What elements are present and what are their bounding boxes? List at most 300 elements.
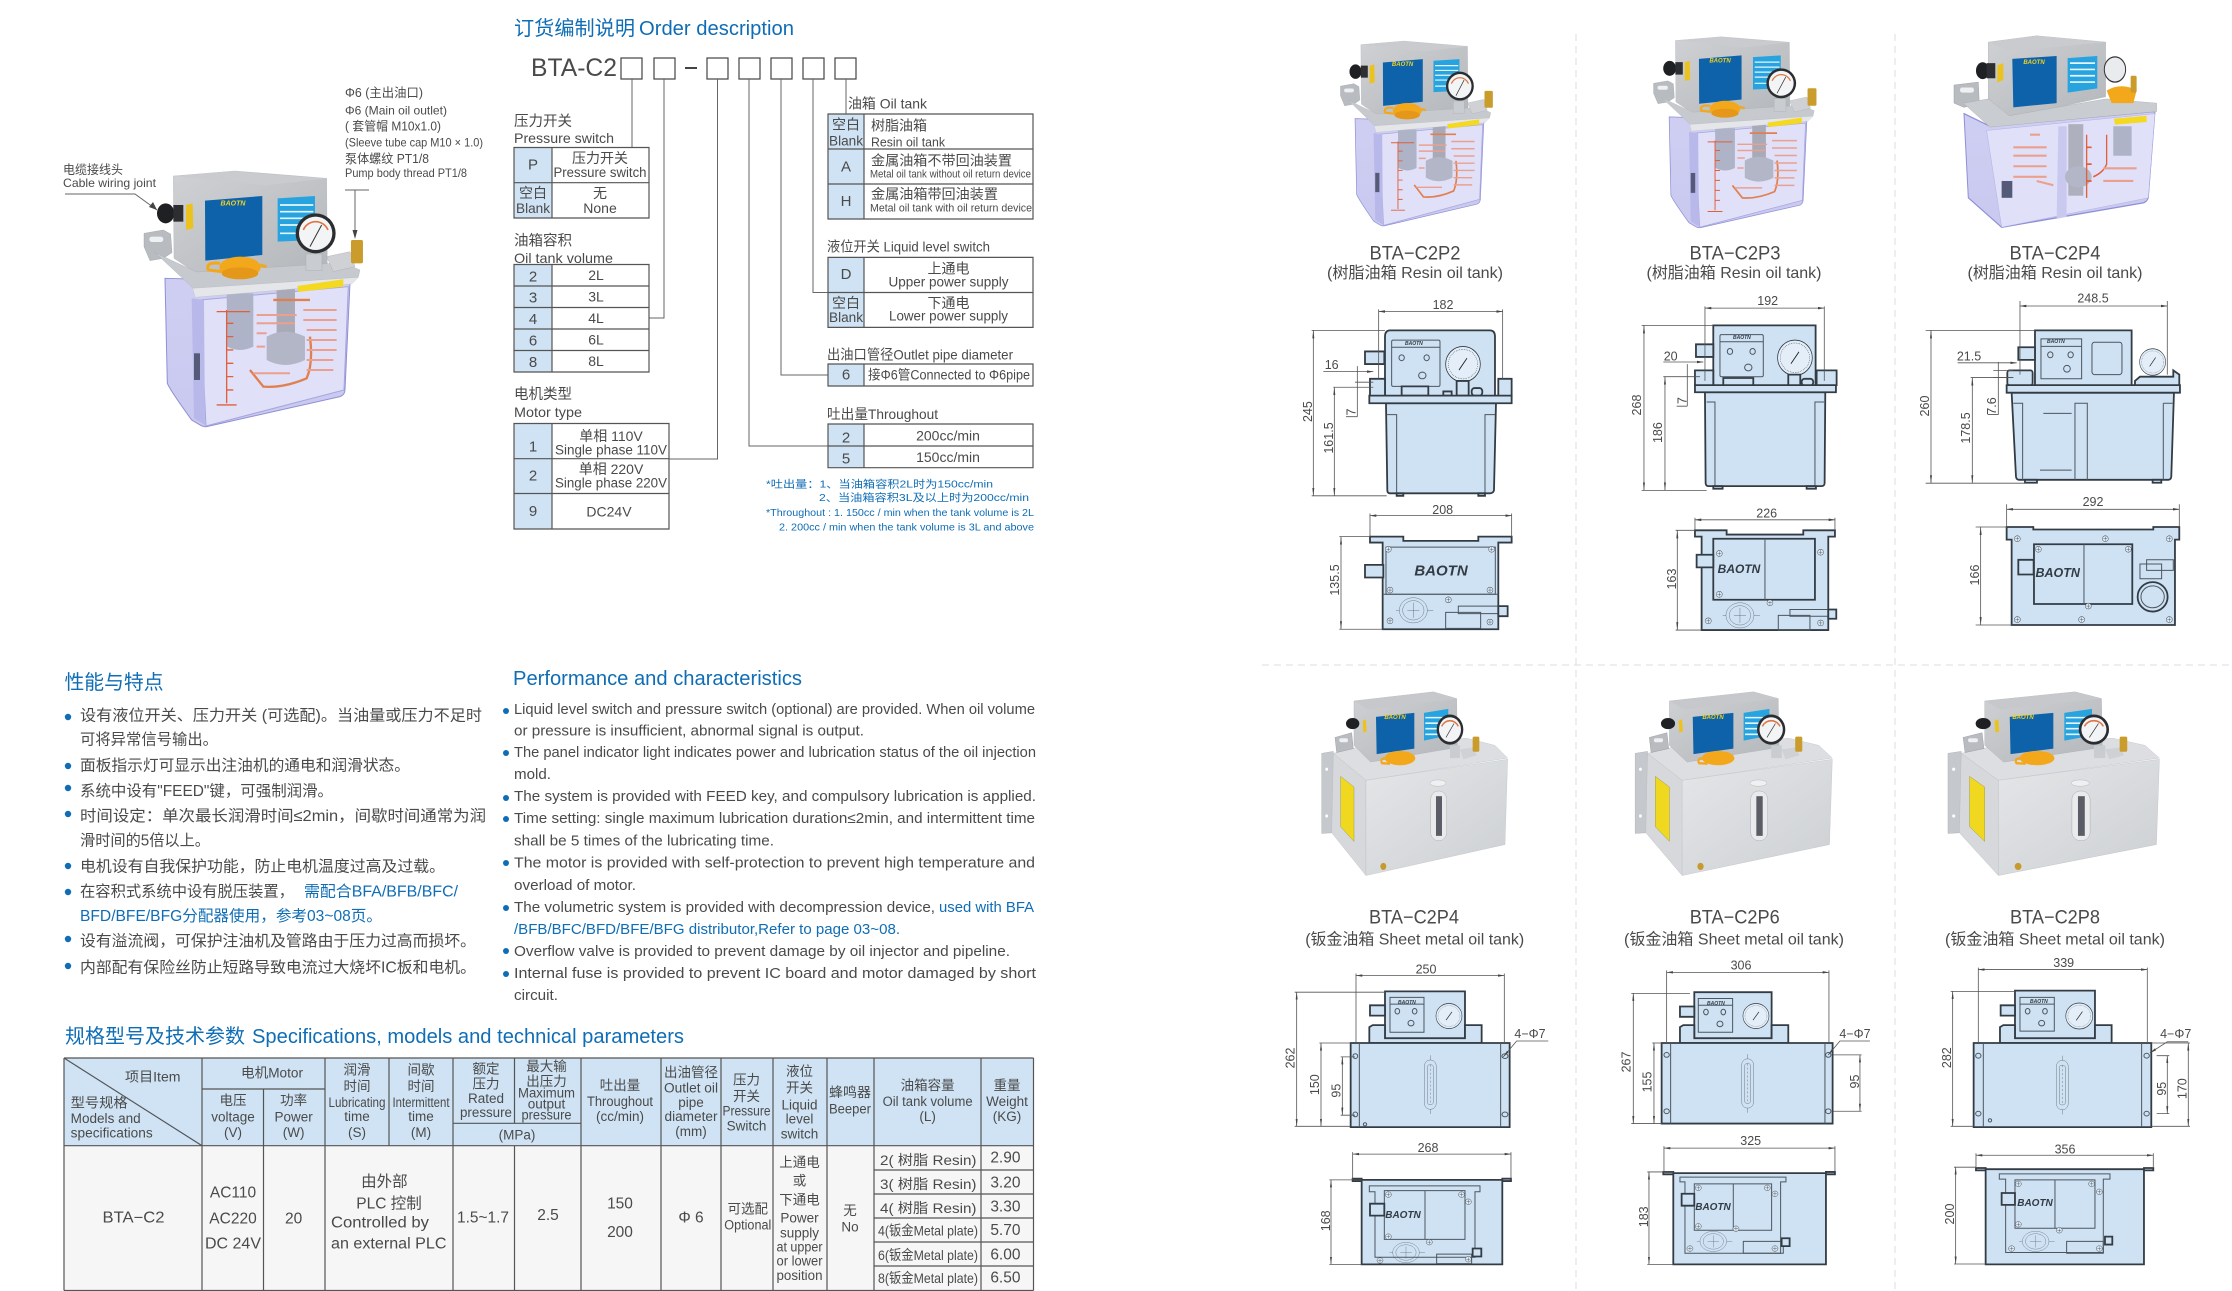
header labels: 电机Motor: [241, 1066, 304, 1080]
header labels: pipe: [678, 1095, 704, 1110]
throughout table: [827, 406, 1033, 468]
characteristics list text: Internal fuse is provided to prevent IC board and motor damaged by short: [514, 966, 1036, 982]
side view drawing with dimensions: 186: [1651, 422, 1665, 443]
header labels: (S): [348, 1125, 366, 1140]
BTA-C2 data row: 6.50: [990, 1270, 1021, 1286]
side view drawing with dimensions: 150: [1308, 1074, 1322, 1095]
side view drawing with dimensions: [1284, 963, 1548, 1127]
header labels: Rated: [468, 1091, 504, 1106]
BTA-C2 data row: 6(钣金Metal plate): [878, 1247, 978, 1263]
callout: main oil outlet and pump body thread: Pump body thread PT1/8: [345, 166, 467, 180]
motor type table: Single phase 110V: [555, 442, 667, 458]
panel: BTA-C2P4 resin: [1918, 36, 2180, 625]
side view drawing with dimensions: 7: [1676, 397, 1690, 404]
throughout table: 150cc/min: [916, 449, 980, 465]
motor type table: 1: [529, 438, 537, 456]
feature list text: 时间设定：单次最长润滑时间≤2min，间歇时间通常为润: [80, 807, 486, 825]
side view drawing with dimensions: 267: [1620, 1052, 1634, 1072]
oil tank volume table: 4: [529, 311, 537, 328]
dashed separators between product panels: [1262, 34, 2232, 1291]
side view drawing with dimensions: 95: [1330, 1084, 1344, 1098]
pressure switch table: 压力开关: [572, 150, 628, 166]
liquid level switch table: Upper power supply: [888, 274, 1009, 289]
product photo: [1948, 692, 2159, 876]
side view drawing with dimensions: 155: [1641, 1072, 1655, 1092]
side view drawing with dimensions: 20: [1664, 350, 1678, 364]
characteristics list text: Liquid level switch and pressure switch (optional) are provided. When oil volume: [514, 702, 1035, 718]
BTA-C2 data row: 3.30: [990, 1198, 1021, 1216]
BTA-C2 data row: Controlled by: [331, 1214, 429, 1232]
pressure switch table: Blank: [516, 200, 551, 216]
heading: order description: 订货编制说明: [514, 17, 635, 40]
BTA-C2 data row: BTA−C2: [102, 1210, 164, 1226]
BTA-C2 data row: 可选配: [728, 1202, 769, 1216]
side view drawing with dimensions: 182: [1433, 298, 1453, 312]
header labels: Outlet oil: [664, 1080, 718, 1096]
product photo: [1340, 41, 1493, 226]
BTA-C2 data row: Φ 6: [678, 1210, 704, 1226]
motor type table: DC24V: [586, 504, 632, 520]
header labels: 功率: [280, 1092, 307, 1108]
header labels: 时间: [408, 1079, 434, 1094]
photo brand label: BAOTN: [1384, 715, 1406, 721]
header labels: (W): [283, 1125, 304, 1140]
oil tank volume table: 4L: [588, 310, 604, 326]
header labels: Liquid: [781, 1098, 818, 1112]
oil tank volume table: 3: [529, 290, 537, 306]
header labels: level: [786, 1112, 813, 1126]
side view drawing with dimensions: 245: [1301, 401, 1315, 422]
top view drawing with dimensions: [1943, 1142, 2153, 1264]
top view drawing with dimensions: 163: [1665, 569, 1679, 589]
header labels: (KG): [993, 1109, 1021, 1124]
table background and grid: [64, 1058, 1034, 1291]
BTA-C2 data row: 5.70: [990, 1222, 1021, 1239]
BTA-C2 data row: 150: [607, 1196, 633, 1212]
throughout table: 2: [842, 430, 850, 446]
characteristics list text: The motor is provided with self-protection to prevent high temperature and: [514, 856, 1035, 872]
BTA-C2 data row: 由外部: [361, 1172, 408, 1190]
side view drawing with dimensions: BAOTN: [2047, 339, 2065, 345]
oil tank volume table: 6L: [588, 332, 604, 348]
BTA-C2 data row: or lower: [776, 1254, 823, 1268]
top view drawing with dimensions: BAOTN: [1414, 562, 1469, 580]
callout: main oil outlet and pump body thread: 泵体螺纹 PT1/8: [345, 152, 429, 166]
BTA-C2 data row: 或: [793, 1174, 806, 1188]
side view drawing with dimensions: 4−Φ7: [1514, 1027, 1546, 1041]
oil tank option table: 空白: [832, 116, 860, 132]
BTA-C2 data row: PLC 控制: [356, 1194, 422, 1212]
BTA-C2 data row: position: [776, 1268, 822, 1283]
side view drawing with dimensions: 16: [1325, 358, 1339, 372]
oil tank volume table: Oil tank volume: [514, 250, 613, 266]
product photo: BTA-C2 resin tank unit: [144, 171, 363, 427]
characteristics list text: Overflow valve is provided to prevent damage by oil injector and pipeline.: [514, 944, 1010, 960]
callout: main oil outlet and pump body thread: ( 套管帽 M10x1.0): [345, 119, 441, 134]
header labels: (mm): [675, 1124, 707, 1139]
header labels: Intermittent: [392, 1095, 450, 1110]
BTA-C2 data row: DC 24V: [205, 1236, 262, 1252]
header labels: voltage: [211, 1110, 255, 1124]
callout: cable wiring joint: Cable wiring joint: [63, 176, 157, 190]
outlet pipe diameter table: [827, 347, 1033, 386]
oil tank option table: Metal oil tank without oil return device: [870, 168, 1031, 180]
liquid level switch table: 液位开关 Liquid level switch: [827, 239, 990, 255]
top view drawing with dimensions: 356: [2055, 1142, 2075, 1156]
oil tank option table: H: [841, 193, 851, 210]
BTA-C2 data row: 无: [843, 1203, 857, 1218]
motor type table: 单相 220V: [579, 461, 644, 477]
side view drawing with dimensions: 262: [1284, 1048, 1298, 1068]
model heading: BTA−C2P8: [2010, 908, 2100, 928]
characteristics list text: mold.: [514, 767, 551, 783]
throughout table: 吐出量Throughout: [827, 406, 938, 422]
oil tank option table: Metal oil tank with oil return device: [870, 202, 1032, 214]
oil tank volume table: 2: [529, 268, 537, 286]
photo brand label: BAOTN: [2012, 715, 2034, 721]
characteristics list text: [514, 702, 1036, 1004]
oil tank option table: Blank: [829, 134, 863, 148]
callout: main oil outlet and pump body thread: Φ6 (主出油口): [345, 86, 423, 100]
heading: specifications, models and technical parameters: Specifications, models and technical parameters: [252, 1026, 684, 1048]
BTA-C2 data row: 3( 树脂 Resin): [880, 1176, 976, 1192]
motor type table: Motor type: [514, 404, 582, 420]
panel: performance and characteristics in English: [503, 668, 1036, 1004]
side view drawing with dimensions: 7.6: [1985, 397, 1999, 415]
top view drawing with dimensions: [1665, 506, 1836, 630]
characteristics list text: circuit.: [514, 988, 558, 1004]
header labels: Switch: [727, 1118, 766, 1134]
side view drawing with dimensions: 95: [1848, 1075, 1862, 1088]
top view drawing with dimensions: 226: [1756, 506, 1777, 520]
header labels: Power: [274, 1110, 313, 1124]
header labels: 开关: [786, 1080, 813, 1096]
header labels: diameter: [664, 1109, 718, 1124]
characteristics list text: shall be 5 times of the lubricating time.: [514, 834, 774, 850]
pressure switch table: None: [583, 200, 617, 216]
leader lines from boxes to option tables: [632, 79, 846, 459]
side view drawing with dimensions: BAOTN: [1405, 341, 1423, 347]
header labels: Weight: [986, 1094, 1028, 1109]
header labels: specifications: [71, 1126, 153, 1140]
header labels: 额定: [472, 1062, 500, 1076]
BTA-C2 data row: 上通电: [779, 1155, 820, 1170]
photo brand label: BAOTN: [221, 200, 246, 208]
motor type table: [514, 386, 669, 529]
side view drawing with dimensions: [1918, 291, 2180, 483]
BTA-C2 data row: No: [841, 1220, 859, 1234]
header labels: output: [528, 1096, 566, 1112]
header labels: 油箱容量: [901, 1077, 955, 1093]
motor type table: 9: [529, 503, 537, 520]
header labels: [71, 1059, 1028, 1142]
top view drawing with dimensions: 208: [1432, 503, 1453, 517]
pressure switch table: 无: [593, 185, 607, 201]
oil tank option table: [828, 95, 1033, 219]
feature list text: BFD/BFE/BFG分配器使用，参考03~08页。: [80, 907, 382, 925]
side view drawing with dimensions: 248.5: [2077, 291, 2109, 305]
characteristics list text: The panel indicator light indicates power and lubrication status of the oil injection: [514, 745, 1036, 761]
oil tank option table: 金属油箱带回油装置: [871, 186, 998, 202]
heading: specifications, models and technical parameters: [65, 1025, 684, 1048]
header labels: switch: [781, 1126, 818, 1142]
header labels: 压力: [472, 1076, 500, 1092]
side view drawing with dimensions: [1620, 959, 1871, 1124]
feature list text: 电机设有自我保护功能，防止电机温度过高及过载。: [80, 858, 445, 876]
BTA-C2 data row: 2( 树脂 Resin): [880, 1152, 976, 1168]
panel: specifications table: [64, 1025, 1034, 1291]
header labels: Lubricating: [328, 1095, 386, 1110]
characteristics list text: /BFB/BFC/BFD/BFE/BFG distributor,Refer to page 03~08.: [514, 922, 900, 938]
characteristics list text: used with BFA: [939, 900, 1034, 916]
BTA-C2 data row: AC110: [210, 1184, 256, 1202]
pressure switch table: Pressure switch: [554, 165, 646, 180]
oil tank option table: 油箱 Oil tank: [848, 95, 928, 111]
header labels: Throughout: [587, 1094, 653, 1109]
callout: main oil outlet and pump body thread: Φ6 (Main oil outlet): [345, 104, 447, 118]
heading: performance features: 性能与特点: [64, 671, 164, 694]
panel: BTA-C2P3: [1630, 37, 1837, 630]
header labels: (cc/min): [596, 1109, 644, 1124]
liquid level switch table: 上通电: [928, 260, 970, 276]
liquid level switch table: Blank: [829, 310, 863, 325]
header labels: Models and: [71, 1111, 141, 1126]
header labels: 开关: [733, 1089, 760, 1104]
side view drawing with dimensions: 4−Φ7: [1839, 1027, 1871, 1041]
BTA-C2 data row: supply: [780, 1226, 819, 1240]
outlet pipe diameter table: 出油口管径Outlet pipe diameter: [827, 347, 1013, 363]
top view drawing with dimensions: [1328, 503, 1512, 629]
heading: performance and characteristics: Performance and characteristics: [513, 668, 802, 690]
characteristics list text: overload of motor.: [514, 878, 636, 894]
header labels: time: [408, 1109, 434, 1124]
side view drawing with dimensions: BAOTN: [1707, 1001, 1725, 1007]
header labels: 间歇: [408, 1062, 435, 1078]
side view drawing with dimensions: 268: [1630, 395, 1644, 415]
photo brand label: BAOTN: [1709, 59, 1731, 65]
oil tank volume table: 2L: [588, 267, 604, 283]
liquid level switch table: 下通电: [928, 295, 970, 311]
header labels: 压力: [733, 1072, 760, 1088]
oil tank volume table: 6: [529, 332, 537, 350]
header labels: Oil tank volume: [883, 1094, 973, 1109]
model code with option boxes: BTA-C2: [531, 54, 617, 82]
side view drawing with dimensions: 250: [1416, 963, 1436, 977]
liquid level switch table: D: [841, 266, 852, 283]
header labels: (L): [919, 1109, 936, 1124]
motor type table: Single phase 220V: [555, 476, 667, 490]
throughput note: [766, 478, 1034, 534]
oil tank volume table: 8L: [588, 353, 604, 369]
tank type subheading: (树脂油箱 Resin oil tank): [1646, 264, 1822, 282]
pressure switch table: Pressure switch: [514, 130, 614, 146]
top view drawing with dimensions: [1968, 495, 2179, 625]
header labels: Pressure: [722, 1104, 770, 1118]
header labels: 液位: [786, 1064, 813, 1079]
bullet dots: [503, 708, 509, 977]
panel: BTA-C2P2: [1301, 41, 1512, 629]
top view drawing with dimensions: 268: [1418, 1141, 1438, 1155]
tank type subheading: (钣金油箱 Sheet metal oil tank): [1945, 930, 2165, 948]
side view drawing with dimensions: 282: [1940, 1047, 1954, 1068]
product photo: [1635, 692, 1832, 876]
oil tank option table: Resin oil tank: [871, 134, 945, 149]
header labels: 型号规格: [71, 1096, 128, 1110]
tank type subheading: (树脂油箱 Resin oil tank): [1327, 264, 1503, 282]
top view drawing with dimensions: 166: [1968, 565, 1982, 585]
product photo: [1322, 692, 1508, 876]
BTA-C2 data row: 20: [285, 1210, 303, 1228]
BTA-C2 data row: 下通电: [779, 1192, 820, 1208]
side view drawing with dimensions: [1940, 956, 2191, 1127]
BTA-C2 data row: 1.5~1.7: [457, 1210, 509, 1226]
bullet dots: [65, 714, 71, 969]
heading: order description: Order description: [639, 18, 794, 40]
feature list text: 内部配有保险丝防止短路导致电流过大烧坏IC板和电机。: [80, 958, 476, 976]
liquid level switch table: Lower power supply: [889, 308, 1008, 324]
motor type table: 单相 110V: [579, 428, 643, 444]
side view drawing with dimensions: 21.5: [1957, 350, 1981, 364]
throughput note: 2. 200cc / min when the tank volume is 3L and above: [779, 522, 1034, 534]
product photo: [1654, 37, 1816, 228]
header labels: 吐出量: [600, 1078, 640, 1093]
feature list text: 面板指示灯可显示出注油机的通电和润滑状态。: [80, 756, 410, 774]
side view drawing with dimensions: 339: [2053, 956, 2074, 970]
BTA-C2 data row: [102, 1150, 1021, 1286]
feature list text: 需配合BFA/BFB/BFC/: [304, 882, 459, 900]
side view drawing with dimensions: 170: [2176, 1078, 2190, 1099]
header labels: (MPa): [499, 1128, 535, 1142]
oil tank option table: 金属油箱不带回油装置: [871, 152, 1012, 168]
oil tank volume table: 油箱容积: [514, 233, 572, 250]
side view drawing with dimensions: 161.5: [1322, 422, 1336, 454]
feature list text: 可将异常信号输出。: [80, 730, 218, 748]
pressure switch table: P: [528, 156, 538, 174]
top view drawing with dimensions: BAOTN: [2035, 566, 2081, 580]
side view drawing with dimensions: 306: [1731, 959, 1751, 973]
callout: cable wiring joint: 电缆接线头: [63, 162, 123, 177]
header labels: Maximum: [518, 1086, 575, 1100]
oil tank volume table: 3L: [588, 288, 604, 304]
side view drawing with dimensions: 4−Φ7: [2160, 1027, 2191, 1041]
side view drawing with dimensions: [1301, 298, 1512, 496]
side view drawing with dimensions: 192: [1757, 294, 1778, 308]
model heading: BTA−C2P4: [1369, 908, 1459, 928]
header labels: pressure: [460, 1105, 512, 1120]
BTA-C2 data row: 200: [607, 1224, 633, 1241]
header labels: Beeper: [829, 1102, 871, 1116]
header labels: (M): [411, 1125, 431, 1140]
callout: cable wiring joint: [63, 162, 157, 210]
liquid level switch table: [827, 239, 1033, 327]
top view drawing with dimensions: 183: [1637, 1206, 1651, 1227]
throughput note: *Throughout : 1. 150cc / min when the tank volume is 2L: [766, 507, 1034, 519]
outlet pipe diameter table: 6: [842, 366, 850, 384]
panel: BTA-C2P4 sheet metal: [1284, 692, 1548, 1264]
pressure switch table: 压力开关: [514, 113, 572, 130]
callout: main oil outlet and pump body thread: (Sleeve tube cap M10 × 1.0): [345, 136, 483, 150]
product photo: [1954, 36, 2157, 227]
model code with option boxes: [531, 54, 856, 82]
throughput note: *吐出量：1、当油箱容积2L时为150cc/min: [766, 478, 993, 491]
BTA-C2 data row: 3.20: [990, 1174, 1021, 1192]
BTA-C2 data row: an external PLC: [331, 1236, 446, 1252]
side view drawing with dimensions: BAOTN: [1733, 335, 1751, 341]
top view drawing with dimensions: 292: [2083, 495, 2103, 509]
motor type table: 电机类型: [514, 386, 572, 403]
feature list text: 设有溢流阀，可保护注油机及管路由于压力过高而损坏。: [80, 932, 476, 950]
heading: order description: [514, 17, 794, 40]
panel: main product with callouts: [63, 86, 483, 427]
feature list text: [80, 706, 486, 976]
throughout table: 5: [842, 450, 850, 468]
photo brand label: BAOTN: [1702, 715, 1724, 721]
oil tank option table: 树脂油箱: [871, 118, 927, 134]
header labels: 出油管径: [664, 1065, 718, 1080]
BTA-C2 data row: 2.90: [990, 1150, 1021, 1166]
motor type table: 2: [529, 468, 537, 484]
top view drawing with dimensions: 325: [1740, 1134, 1761, 1148]
model heading: BTA−C2P3: [1690, 244, 1780, 264]
oil tank volume table: [514, 233, 649, 372]
header labels: 时间: [344, 1079, 370, 1094]
BTA-C2 data row: 2.5: [537, 1207, 559, 1224]
side view drawing with dimensions: BAOTN: [1398, 1000, 1416, 1006]
feature list text: 设有液位开关、压力开关 (可选配)。当油量或压力不足时: [80, 706, 482, 724]
top view drawing with dimensions: [1637, 1134, 1835, 1264]
panel: order description: [514, 17, 1034, 534]
header labels: 出压力: [526, 1074, 567, 1089]
side view drawing with dimensions: [1630, 294, 1837, 490]
header labels: 润滑: [344, 1062, 370, 1078]
pressure switch table: [514, 113, 649, 218]
top view drawing with dimensions: [1319, 1141, 1511, 1264]
characteristics list text: Time setting: single maximum lubrication duration≤2min, and intermittent time: [514, 811, 1035, 827]
header labels: 最大输: [526, 1059, 567, 1074]
characteristics list text: The volumetric system is provided with decompression device,: [514, 900, 935, 916]
model heading: BTA−C2P2: [1370, 244, 1460, 264]
BTA-C2 data row: at upper: [776, 1240, 823, 1254]
characteristics list text: The system is provided with FEED key, and compulsory lubrication is applied.: [514, 789, 1036, 805]
throughout table: 200cc/min: [916, 428, 980, 444]
top view drawing with dimensions: 168: [1319, 1210, 1333, 1231]
side view drawing with dimensions: 7: [1345, 408, 1359, 415]
characteristics list text: or pressure is insufficient, abnormal signal is output.: [514, 724, 864, 740]
feature list text: 滑时间的5倍以上。: [80, 832, 210, 850]
photo brand label: BAOTN: [1392, 62, 1414, 68]
tank type subheading: (钣金油箱 Sheet metal oil tank): [1305, 930, 1524, 948]
top view drawing with dimensions: 200: [1943, 1204, 1957, 1224]
heading: specifications, models and technical parameters: 规格型号及技术参数: [65, 1025, 245, 1048]
BTA-C2 data row: 6.00: [990, 1246, 1021, 1264]
top view drawing with dimensions: BAOTN: [1385, 1210, 1422, 1221]
header labels: 蜂鸣器: [829, 1084, 872, 1100]
BTA-C2 data row: Power: [780, 1210, 819, 1226]
callout: main oil outlet and pump body thread: [345, 86, 483, 239]
header labels: pressure: [522, 1108, 572, 1122]
header labels: 重量: [994, 1078, 1020, 1093]
BTA-C2 data row: Optional: [724, 1218, 771, 1232]
outlet pipe diameter table: 接Φ6管Connected to Φ6pipe: [868, 366, 1030, 382]
panel: performance features in Chinese: [64, 671, 486, 976]
tank type subheading: (树脂油箱 Resin oil tank): [1968, 264, 2142, 282]
photo brand label: BAOTN: [2023, 60, 2045, 66]
liquid level switch table: 空白: [832, 295, 860, 311]
header labels: 电压: [220, 1093, 246, 1108]
side view drawing with dimensions: BAOTN: [2030, 999, 2048, 1005]
BTA-C2 data row: AC220: [209, 1210, 257, 1228]
feature list text: 在容积式系统中设有脱压装置，: [80, 882, 294, 900]
